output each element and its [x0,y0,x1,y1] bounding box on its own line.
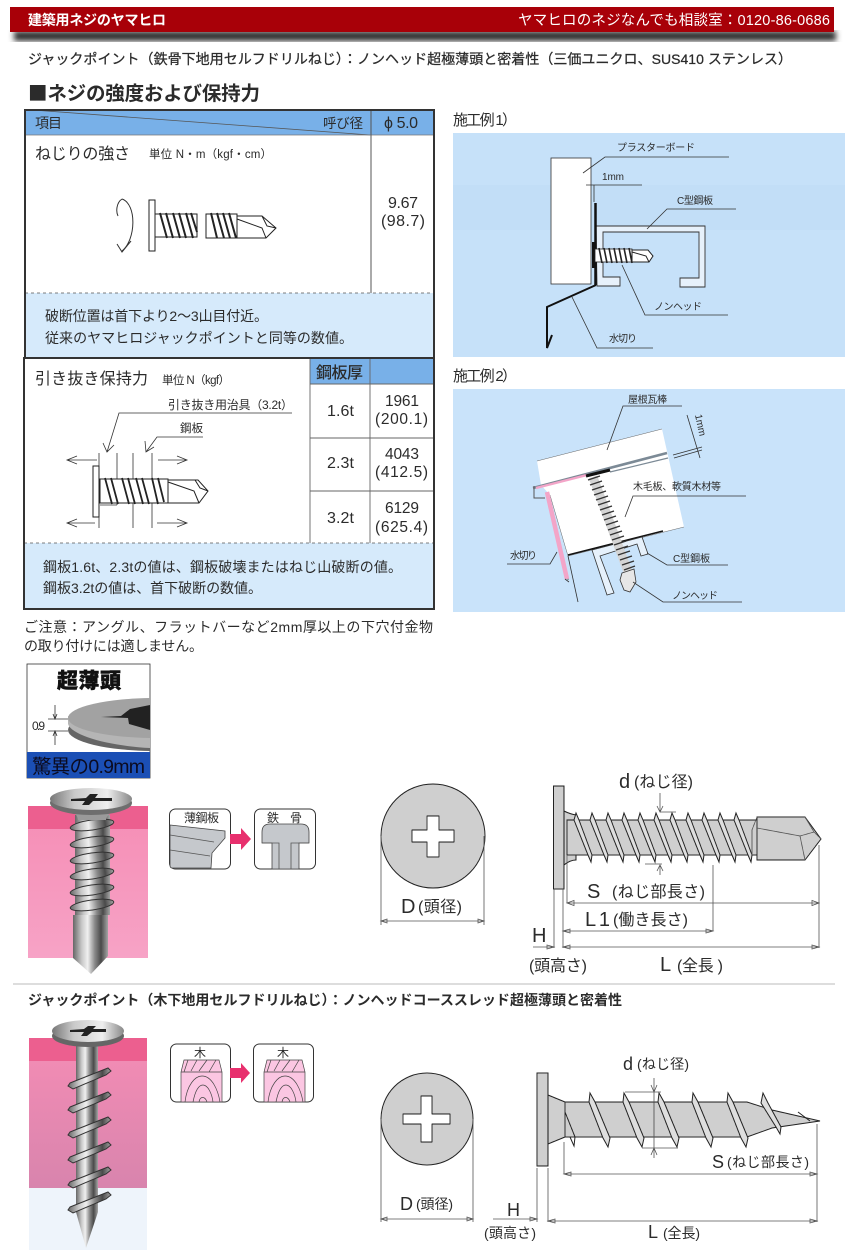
label: d thread diameter [619,771,693,793]
label: L1 working length: (働き長さ) [613,911,688,929]
torsion unit: 単位 N・m（kgf・cm） [149,147,272,161]
note: fracture position: 破断位置は首下より2〜3山目付近。 [45,308,268,324]
label: H: H [507,1200,520,1220]
heading: example 1: 施工例 1） [453,112,517,129]
caution note [24,619,433,654]
panel: ultra-thin head callout [26,664,150,778]
label: wood wool board: 木毛板、軟質木材等 [633,480,721,493]
row: 3.2t: (625.4) [375,519,428,536]
label: H: H [532,925,546,947]
row: 2.3t: 4043 [385,446,419,463]
torsion value: 9.67 [388,195,418,212]
label: S thread length: S [587,881,600,903]
product subtitle: ジャックポイント（鉄骨下地用セルフドリルねじ）：ノンヘッド超極薄頭と密着性（三価ユニクロ、SUS410 ステンレス） [28,51,792,67]
label: head height: (頭高さ) [484,1225,536,1241]
header bar [10,7,836,41]
callout title: 超薄頭 [57,670,121,693]
label: wood: 木 [277,1046,289,1060]
column header: nominal diameter: 呼び径 [323,116,364,131]
label: C-type steel: C型鋼板 [677,194,713,207]
icon: pull-out test diagram [67,413,292,528]
torsion value [381,195,425,230]
row: 2.3t: 2.3t [327,455,355,472]
label: S thread length [587,881,705,903]
row: 1.6t: 1961 [385,393,419,410]
note: failure values [43,559,402,596]
section heading: ■ネジの強度および保持力 [28,77,260,106]
label: d thread diameter [623,1054,689,1074]
label: L1 working length: L 1 [585,909,610,931]
label: flashing: 水切り [510,550,537,562]
label: head diameter: (頭径) [418,898,462,916]
label: L total length: L [648,1222,658,1242]
label: plaster board: プラスターボード [617,142,695,154]
row: 1.6t [327,393,428,428]
label: flashing: 水切り [609,333,637,345]
icon: wood before [170,1044,230,1102]
arrow: pink conversion [230,828,251,850]
torsion value: (98.7) [381,213,425,230]
illustration: coarse thread screw in pink material [29,1020,147,1250]
diagram: coarse head top view [381,1073,473,1222]
label: L total length: (全長) [663,1225,700,1241]
row: 2.3t: (412.5) [375,464,428,481]
label: S thread length [712,1152,809,1172]
label: non-head screw: ノンヘッド [672,591,718,602]
contact phone: ヤマヒロのネジなんでも相談室：0120-86-0686 [518,12,830,29]
header: plate thickness: 鋼板厚 [316,364,363,382]
heading: example 2: 施工例 2） [453,368,517,385]
section 2 subtitle: ジャックポイント（木下地用セルフドリルねじ）：ノンヘッドコーススレッド超極薄頭と密着性 [28,992,622,1008]
row: 1.6t: (200.1) [375,411,428,428]
label: S thread length: (ねじ部長さ) [727,1154,809,1170]
icon: wood after [254,1044,314,1102]
label: S thread length: S [712,1152,724,1172]
label: L total length [648,1222,700,1242]
label: head height: (頭高さ) [529,957,587,975]
pull-out unit: 単位 N（kgf） [162,373,230,387]
icon: screw with rotation arrow [117,199,276,252]
column header: item: 項目 [35,115,62,131]
diagram: coarse screw side view [484,1054,820,1242]
panel: construction example 1 [453,133,845,357]
row: 3.2t: 3.2t [327,510,355,527]
caution note: の取り付けには適しません。 [24,638,203,654]
icon: thin steel plate [170,809,230,869]
label: steel plate: 鋼板 [180,421,204,435]
illustration: self-drilling screw in pink material [28,788,148,974]
label: d thread diameter: (ねじ径) [637,1056,689,1072]
label: roof batten: 屋根瓦棒 [628,393,667,406]
label: D: D [401,896,415,918]
panel: torsion strength table [25,110,434,358]
panel: pull-out retention table [24,358,434,609]
label: jig: 引き抜き用治具（3.2t） [168,398,293,412]
panel: construction example 2 [453,389,845,612]
label: L total length: (全長 ) [677,957,723,975]
arrow: pink conversion [230,1063,250,1083]
label: L total length [660,954,723,976]
label: d thread diameter: d [619,771,630,793]
callout caption: 驚異の0.9mm [32,756,145,778]
diagram: head top view with D dimension [381,784,485,925]
icon: steel frame [254,809,316,869]
label: wood: 木 [194,1046,206,1060]
label: S thread length: (ねじ部長さ) [612,883,705,901]
label: D: D [400,1194,413,1214]
row: 2.3t [327,446,428,481]
label: 1mm gap: 1mm [692,413,707,437]
label: thin steel: 薄鋼板 [184,810,219,825]
note: fracture position: 従来のヤマヒロジャックポイントと同等の数値。 [45,330,353,346]
brand name: 建築用ネジのヤマヒロ [28,12,166,28]
column header: phi 5.0: ϕ 5.0 [384,115,418,132]
label: head diameter: (頭径) [416,1196,453,1212]
note: fracture position [45,308,353,346]
label: L1 working length [585,909,688,931]
label: L total length: L [660,954,671,976]
caution note: ご注意：アングル、フラットバーなど2mm厚以上の下穴付金物 [24,619,433,635]
note: failure values: 鋼板1.6t、2.3tの値は、鋼板破壊またはねじ山破断の値。 [43,559,402,575]
row: 3.2t: 6129 [385,500,419,517]
label: d thread diameter: (ねじ径) [634,773,693,791]
label: non-head screw: ノンヘッド [654,302,702,313]
diagram: self-drilling screw side view [529,771,821,976]
label: 1mm: 1mm [602,172,624,183]
label: steel frame: 鉄 骨 [267,810,302,825]
label: d thread diameter: d [623,1054,633,1074]
torsion heading: ねじりの強さ [35,145,130,163]
dimension: 0.9: 0.9 [32,719,45,733]
row: 3.2t [327,500,428,536]
pull-out heading: 引き抜き保持力 [35,370,148,388]
row: 1.6t: 1.6t [327,403,355,420]
label: C-type steel: C型鋼板 [673,552,710,565]
note: failure values: 鋼板3.2tの値は、首下破断の数値。 [43,580,262,596]
